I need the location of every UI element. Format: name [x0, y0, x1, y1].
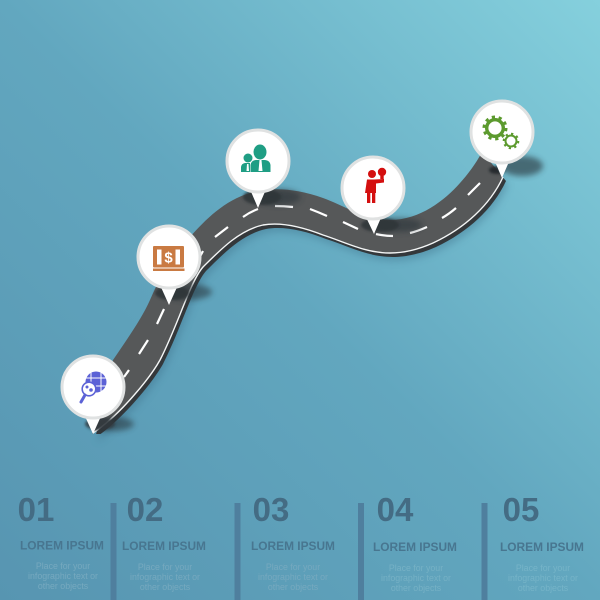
column 2: LOREM IPSUM [122, 539, 206, 553]
column 3: LOREM IPSUM [251, 539, 335, 553]
column 1 [18, 491, 104, 591]
pin 4: idea [342, 157, 404, 234]
pin shadows [85, 156, 543, 431]
column 4: 04 [377, 491, 414, 528]
column 4 [373, 491, 457, 593]
pin 5: settings [471, 101, 533, 178]
column 2 [122, 491, 206, 592]
pin 3: team [227, 130, 289, 208]
icon: laptop with dollar: $ [164, 250, 173, 266]
column 3: Place for your [266, 562, 320, 572]
column 4: LOREM IPSUM [373, 540, 457, 554]
column 3: infographic text or [258, 572, 328, 582]
column 5 [500, 491, 584, 593]
icon: business people [241, 144, 270, 172]
column 5: Place for your [516, 563, 570, 573]
column 1: LOREM IPSUM [20, 538, 104, 552]
column 4: Place for your [389, 563, 443, 573]
column 5: other objects [518, 583, 569, 593]
lane dashes [124, 183, 480, 377]
icon: person with light bulb [365, 168, 386, 203]
road [92, 152, 508, 442]
column 2: 02 [127, 491, 163, 528]
column 2: infographic text or [130, 572, 200, 582]
icon: globe and magnifier [81, 371, 107, 402]
column 4: infographic text or [381, 573, 451, 583]
column 5: 05 [503, 491, 539, 528]
column 1: other objects [38, 581, 89, 591]
column 2: Place for your [138, 562, 192, 572]
pin 1: research [62, 356, 124, 434]
column 3 [251, 491, 335, 592]
column 1: Place for your [36, 561, 90, 571]
column 2: other objects [140, 582, 191, 592]
column 3: 03 [253, 491, 289, 528]
column 1: infographic text or [28, 571, 98, 581]
icon: gears [484, 117, 518, 148]
column 4: other objects [391, 583, 442, 593]
column 3: other objects [268, 582, 319, 592]
pin 2: finance [138, 226, 200, 305]
column 5: infographic text or [508, 573, 578, 583]
column 5: LOREM IPSUM [500, 540, 584, 554]
column 1: 01 [18, 491, 54, 528]
column dividers [110, 503, 488, 600]
